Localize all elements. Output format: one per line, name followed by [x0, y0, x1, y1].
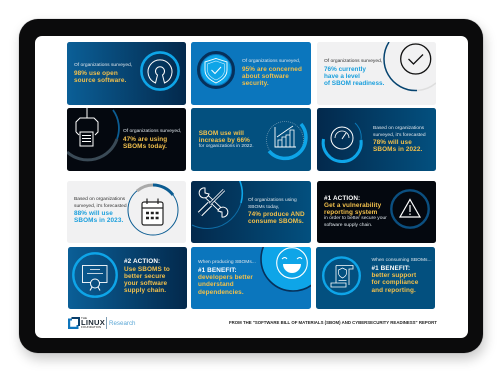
text: 78% will use: [373, 139, 412, 146]
text: consume SBOMs.: [248, 218, 304, 225]
icon: calendar ring: [128, 184, 178, 236]
text: Of organizations surveyed,: [242, 59, 300, 64]
text: for compliance: [372, 279, 418, 286]
icon: warning: [390, 189, 430, 229]
logo: The Linux Foundation Research: FOUNDATION: [81, 325, 101, 329]
logo: The Linux Foundation Research: THE: [81, 316, 87, 320]
text: [124, 258, 170, 294]
panel: 88% in 2023: [67, 181, 186, 243]
footer source line: FROM THE "SOFTWARE BILL OF MATERIALS (SBOM) AND CYBERSECURITY READINESS" REPORT: [229, 320, 437, 325]
panel: #2 action: [68, 247, 187, 309]
panel: 95% concerned: [191, 42, 311, 105]
text: Of organizations using: [248, 198, 297, 203]
text: [198, 260, 256, 296]
icon: check ring: [383, 42, 436, 92]
text: Of organizations surveyed,: [74, 63, 132, 68]
text: [74, 62, 132, 84]
icon: tools: [192, 181, 244, 229]
text: 95% are concerned: [242, 66, 302, 73]
text: [248, 198, 305, 225]
text: [74, 196, 127, 224]
text: #1 ACTION:: [324, 194, 360, 202]
text: have a level: [324, 73, 360, 80]
text: SBOMs today,: [248, 205, 279, 210]
panel: #1 action: [317, 181, 436, 243]
text: and reporting.: [372, 287, 416, 294]
text: Get a vulnerability: [324, 202, 381, 209]
text: [123, 128, 181, 150]
text: Based on organizations: [373, 126, 424, 131]
text: #1 BENEFIT:: [372, 265, 410, 272]
text: [372, 258, 432, 294]
text: your software: [124, 280, 167, 287]
text: surveyed, it's forecasted: [74, 204, 127, 209]
text: 74% produce AND: [248, 211, 305, 218]
text: [198, 130, 254, 149]
text: When producing SBOMs...: [198, 260, 256, 265]
logo: The Linux Foundation Research: LINUX: [81, 318, 105, 327]
text: [242, 58, 302, 87]
icon: document claw: [67, 108, 120, 162]
icon: growth chart: [266, 121, 308, 160]
text: Use SBOMS to: [124, 266, 170, 273]
text: developers better: [198, 274, 253, 281]
icon: compliance scroll: [322, 256, 361, 296]
panel: 78% in 2022: [317, 108, 436, 171]
text: reporting system: [324, 209, 377, 216]
icon: open source ring: [140, 51, 180, 91]
text: better secure: [124, 273, 165, 280]
text: understand: [198, 281, 234, 288]
text: SBOMs today.: [123, 143, 167, 150]
icon: shield: [197, 51, 235, 89]
text: Of organizations surveyed,: [123, 129, 181, 134]
text: #1 BENEFIT:: [198, 267, 237, 274]
text: in order to better secure your: [324, 216, 387, 221]
tablet screen: [35, 36, 468, 338]
text: [324, 194, 387, 228]
text: Based on organizations: [74, 197, 125, 202]
panel: use increase 66%: [191, 108, 311, 171]
panel: 47% using SBOMs: [67, 108, 186, 171]
icon: certificate: [72, 252, 118, 298]
text: SBOMs in 2022.: [373, 146, 422, 153]
text: 76% currently: [324, 66, 366, 73]
text: 88% will use: [74, 210, 113, 217]
text: for organizations in 2022.: [199, 144, 254, 149]
text: better support: [372, 272, 416, 279]
text: SBOM use will: [199, 130, 244, 136]
text: source software.: [74, 77, 126, 84]
panel: 74% produce and consume: [191, 181, 311, 243]
text: #2 ACTION:: [124, 258, 160, 265]
logo: The Linux Foundation Research: [68, 316, 136, 329]
icon: gauge: [322, 122, 363, 163]
text: SBOMs in 2023.: [74, 217, 123, 224]
panel: #1 benefit producing: [191, 247, 311, 309]
text: When consuming SBOMs...: [372, 258, 432, 263]
text: [324, 58, 384, 87]
text: increase by 66%: [199, 137, 250, 144]
text: software supply chain.: [324, 223, 372, 228]
text: Of organizations surveyed,: [324, 59, 382, 64]
text: dependencies.: [198, 289, 244, 296]
text: surveyed, it's forecasted: [373, 133, 426, 138]
logo: The Linux Foundation Research: Research: [109, 320, 135, 327]
text: [373, 126, 426, 153]
panel: 98% open source: [67, 42, 186, 105]
panel: 76% readiness: [317, 42, 436, 105]
text: security.: [242, 80, 269, 87]
text: of SBOM readiness.: [324, 80, 384, 87]
text: 98% use open: [74, 70, 118, 77]
text: supply chain.: [124, 287, 166, 294]
text: 47% are using: [123, 136, 167, 143]
text: about software: [242, 73, 289, 80]
panel: #1 benefit consuming: [316, 247, 434, 309]
icon: smiley: [260, 247, 311, 292]
